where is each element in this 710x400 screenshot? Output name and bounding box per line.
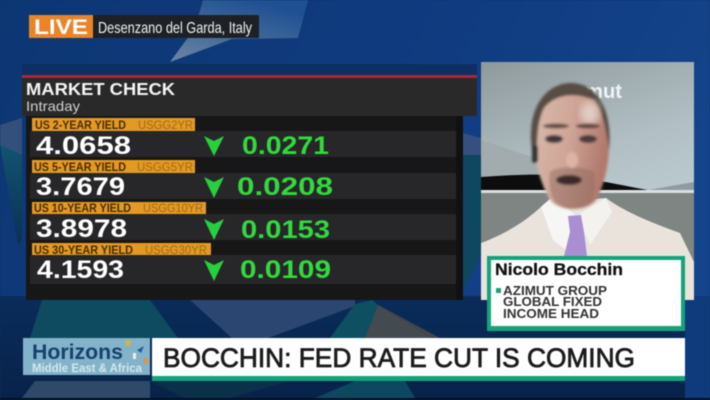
- row: US 30-year yield: 4.1593: [37, 256, 124, 284]
- row: US 10-year yield: US 10-YEAR YIELD: [34, 203, 131, 215]
- row: US 10-year yield: 0.0153: [241, 216, 330, 244]
- row: US 30-year yield: [30, 243, 456, 284]
- speaker: [481, 83, 694, 300]
- horizons logo bar: [23, 338, 150, 375]
- row: US 2-year yield: [30, 118, 456, 160]
- row: US 30-year yield: US 30-YEAR YIELD: [34, 245, 133, 257]
- lower third: speaker name: [487, 256, 685, 331]
- location label: [93, 15, 259, 38]
- row: US 5-year yield: US 5-YEAR YIELD: [34, 162, 126, 174]
- job title: GLOBAL FIXED: [503, 294, 602, 309]
- horizons logo bar: Middle East & Africa: [32, 361, 142, 375]
- row: US 10-year yield: USGG10YR: [143, 203, 203, 215]
- row: US 2-year yield: US 2-YEAR YIELD: [35, 120, 126, 132]
- row: US 5-year yield: [30, 160, 456, 201]
- row: US 5-year yield: 3.7679: [36, 173, 125, 201]
- name: Nicolo Bocchin: [495, 260, 623, 279]
- row: US 2-year yield: 4.0658: [36, 132, 131, 160]
- wall logo text: mut: [585, 81, 622, 103]
- row: US 5-year yield: USGG5YR: [137, 162, 193, 174]
- job title: INCOME HEAD: [503, 306, 599, 321]
- row: US 10-year yield: 3.8978: [36, 215, 127, 243]
- live badge: [29, 15, 93, 39]
- row: US 30-year yield: 0.0109: [240, 256, 331, 284]
- subheading: Intraday: [26, 98, 80, 114]
- job title: AZIMUT GROUP: [503, 283, 607, 298]
- live badge: LIVE: [34, 16, 88, 39]
- bullet: [496, 288, 501, 293]
- job title: [503, 283, 607, 321]
- row: US 2-year yield: 0.0271: [242, 132, 329, 160]
- panel: speaker video: [481, 62, 694, 300]
- row: US 30-year yield: USGG30YR: [145, 245, 207, 257]
- row: US 2-year yield: USGG2YR: [138, 120, 193, 132]
- panel: market check: [22, 64, 477, 300]
- headline banner: BOCCHIN: FED RATE CUT IS COMING: [163, 343, 635, 373]
- heading: MARKET CHECK: [26, 79, 175, 99]
- row: US 5-year yield: 0.0208: [237, 173, 333, 201]
- headline banner: [152, 338, 685, 381]
- row: US 10-year yield: [30, 202, 456, 244]
- horizons logo bar: Horizons: [32, 341, 123, 364]
- location label: Desenzano del Garda, Italy: [98, 20, 252, 37]
